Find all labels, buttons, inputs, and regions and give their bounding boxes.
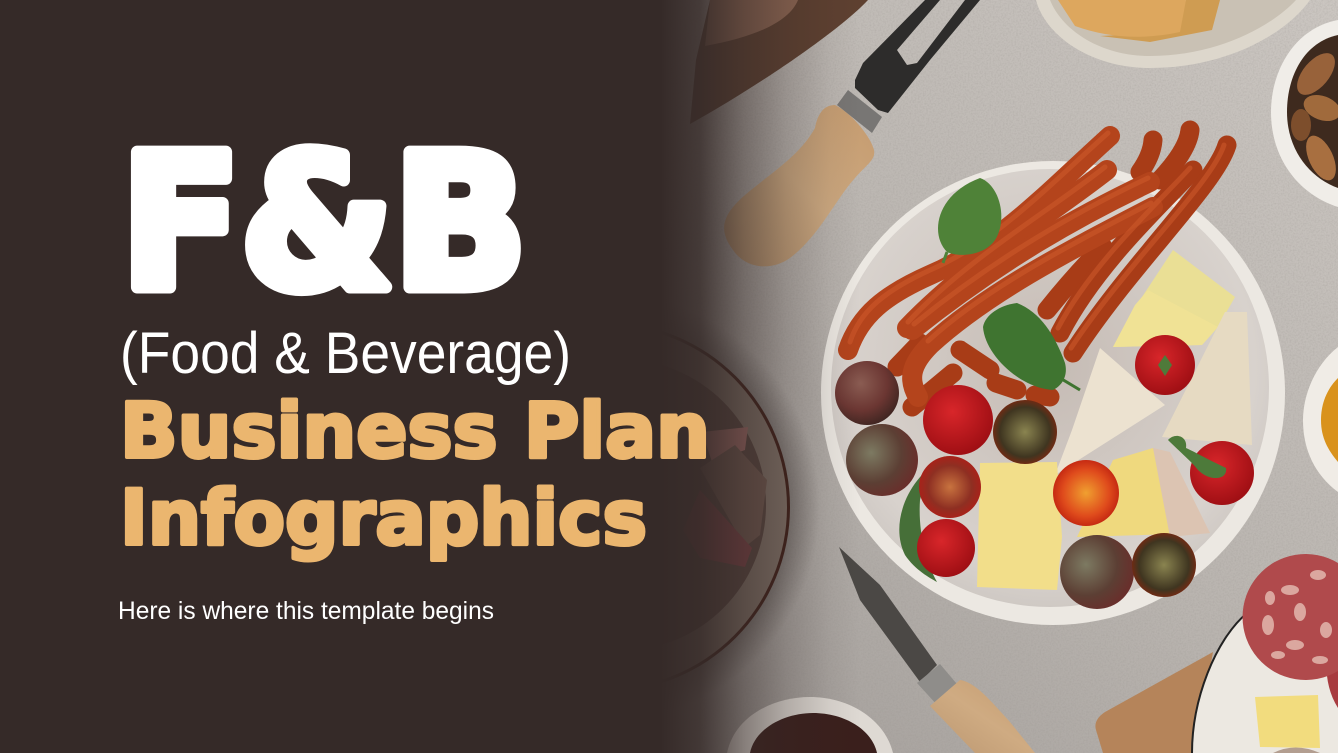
gradient fade — [660, 0, 860, 753]
almond bowl — [1271, 20, 1338, 207]
dark panel fading over photo — [0, 0, 662, 753]
fork with wooden handle — [724, 0, 980, 266]
wooden board and salami plate — [1095, 554, 1338, 753]
subtitle: Food & Beverage: (Food & Beverage) — [120, 321, 571, 386]
tomatoes — [835, 335, 1254, 609]
tagline: Here is where this template begins — [118, 597, 494, 625]
basil leaves — [899, 178, 1080, 582]
cheese knife — [839, 547, 1035, 753]
heading: Business Plan: Business Plan — [120, 386, 710, 475]
main plate — [821, 130, 1285, 625]
wooden board top — [690, 0, 868, 124]
heading: Infographics: Infographics — [120, 473, 647, 562]
honey bowl — [1303, 347, 1338, 492]
photo: food platter on stone table — [390, 0, 1338, 753]
cheese wedges — [977, 250, 1252, 590]
title: F&B: F&B — [121, 115, 527, 331]
jam bowl — [727, 697, 893, 753]
sausages — [848, 130, 1227, 407]
dark side plate — [390, 292, 820, 722]
cracker plate top — [1036, 0, 1310, 68]
